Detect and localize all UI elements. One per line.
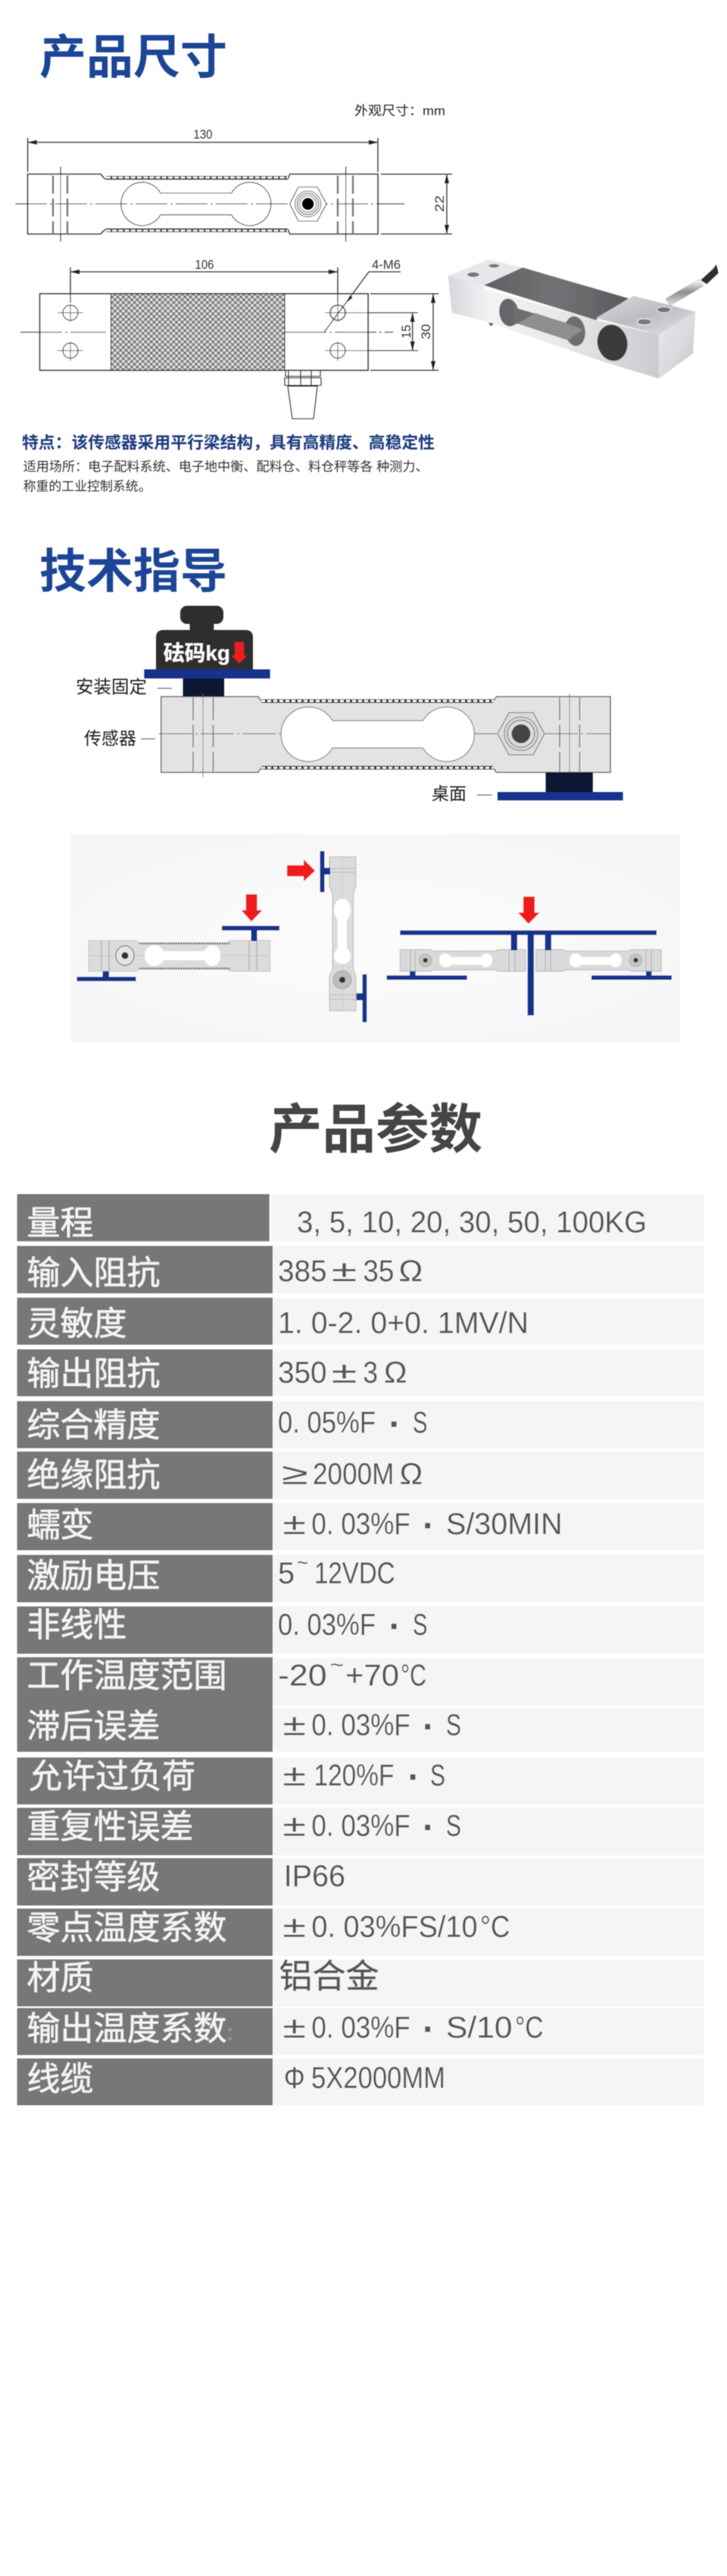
rows: working temperature and hysteresis: 0. 03%F [311, 1708, 410, 1742]
pointer: table [477, 794, 492, 796]
bone hole [281, 707, 474, 762]
dimension 106: 106 [195, 257, 214, 272]
drawing: top view with dimensions 106, 30, 15 and 4-M6 [20, 257, 438, 419]
row: output impedance: 350 [278, 1356, 327, 1389]
row: repeatability [17, 1800, 704, 1855]
top load bar with stems [400, 931, 657, 1015]
application text [23, 460, 429, 494]
row: range [17, 1194, 704, 1244]
row: cable: 5X2000MM [311, 2062, 445, 2095]
row: input impedance: 385 [278, 1255, 327, 1288]
heading: technical guide: 技术指导 [39, 533, 227, 601]
row: material: 铝合金 [279, 1949, 379, 1997]
row: allowable overload [17, 1749, 704, 1804]
label: sensor: 传感器 [84, 724, 136, 750]
row: overall accuracy: S [413, 1406, 427, 1439]
row: overall accuracy [17, 1398, 704, 1448]
row: output impedance: 3 [363, 1356, 378, 1389]
row: repeatability: S [446, 1810, 461, 1843]
orientation: horizontal single [77, 894, 279, 981]
red arrow down [232, 642, 247, 663]
row: zero temperature coefficient [17, 1901, 704, 1956]
row: non-linearity: 0. 03%F [278, 1608, 376, 1642]
row: input impedance [17, 1246, 704, 1294]
top mounting plate [144, 669, 270, 678]
application text: 称重的工业控制系统。 [23, 479, 151, 494]
row: repeatability: 0. 03%F [311, 1810, 410, 1843]
row: output temperature coefficient: ± [282, 2011, 306, 2044]
row: cable [17, 2052, 704, 2105]
row: non-linearity [17, 1598, 704, 1654]
row: sealing grade: IP66 [284, 1860, 345, 1893]
bands and centre lines [193, 697, 579, 772]
cable [668, 264, 719, 302]
label: table: 桌面 [432, 779, 466, 805]
row: creep [17, 1498, 704, 1550]
row: creep: ± [282, 1508, 306, 1541]
table plate [498, 792, 623, 800]
row: input impedance: 35 [363, 1255, 394, 1288]
row: allowable overload: S [430, 1759, 445, 1792]
row: allowable overload: 允许过负荷 [29, 1749, 195, 1798]
dimension 22: 22 [432, 195, 447, 212]
bone slot through hole [498, 298, 587, 348]
bottom support block [546, 772, 593, 792]
row: non-linearity: · [389, 1607, 401, 1647]
dimension 130 [28, 127, 378, 172]
rows: working temperature and hysteresis: S [446, 1708, 461, 1742]
rows: working temperature and hysteresis: · [423, 1707, 435, 1748]
top right block [596, 296, 695, 335]
row: overall accuracy: · [389, 1405, 401, 1445]
row: cable: 线缆 [27, 2052, 94, 2100]
sensor outline [28, 174, 378, 234]
row: input impedance: Ω [398, 1255, 423, 1288]
row: allowable overload: · [408, 1757, 420, 1798]
row: sensitivity: 灵敏度 [27, 1296, 127, 1345]
diagram: load on sensor mounted on table [76, 606, 623, 805]
threaded holes [467, 264, 671, 325]
top T plate [320, 851, 330, 892]
red arrow down [242, 894, 262, 922]
panel: three mounting orientations [71, 834, 680, 1043]
row: output temperature coefficient: 输出温度系数: [27, 2001, 233, 2050]
left mini sensor [400, 950, 526, 971]
row: insulation resistance: 绝缘阻抗 [27, 1448, 161, 1496]
row: excitation voltage: ~ [297, 1551, 308, 1574]
row: creep: 蠕变 [27, 1498, 94, 1546]
heading: product dimensions: 产品尺寸 [39, 19, 227, 87]
row: range: 3, 5, 10, 20, 30, 50, 100KG [297, 1206, 647, 1240]
orientation: dual mirrored [386, 897, 672, 1015]
row: input impedance: 输入阻抗 [27, 1246, 161, 1294]
row: output temperature coefficient: °C [515, 2011, 544, 2044]
row: zero temperature coefficient: ± [282, 1910, 306, 1944]
leader 4-M6 [324, 257, 401, 332]
row: sensitivity [17, 1296, 704, 1345]
bone hole [121, 182, 271, 226]
end tab [488, 323, 494, 326]
orientation: vertical single [287, 851, 367, 1022]
front face [448, 276, 659, 379]
heading: product parameters: 产品参数 [269, 1087, 482, 1164]
row: repeatability: · [423, 1808, 435, 1848]
bottom T plate [357, 975, 367, 1022]
round through hole [594, 322, 631, 363]
calibration weight [156, 606, 253, 670]
bead strips [106, 177, 288, 230]
end bands [53, 176, 353, 234]
row: non-linearity: S [413, 1608, 427, 1642]
dimension 30: 30 [419, 324, 433, 339]
centre line [20, 332, 393, 333]
rows: working temperature and hysteresis [17, 1648, 704, 1752]
row: creep: · [423, 1506, 435, 1546]
pointer: sensor [141, 738, 155, 740]
row: creep: 0. 03%F [311, 1508, 410, 1541]
rows: working temperature and hysteresis: °C [401, 1659, 426, 1692]
drawing: side view with dimensions 130 and 22 [15, 127, 452, 242]
row: zero temperature coefficient: °C [480, 1910, 510, 1944]
row: allowable overload: ± [282, 1759, 306, 1792]
label: mounting: 安装固定 [76, 672, 147, 698]
top left block [448, 260, 523, 285]
red arrow down [518, 897, 539, 924]
row: excitation voltage: 激励电压 [27, 1548, 161, 1597]
row: creep: S/30MIN [446, 1508, 563, 1541]
row: insulation resistance [17, 1448, 704, 1499]
row: output impedance: ± [332, 1356, 357, 1389]
pointer: mounting [158, 688, 172, 689]
dimension 15: 15 [399, 325, 413, 338]
row: allowable overload: 120%F [314, 1759, 394, 1792]
caption: outline dimensions unit: 外观尺寸：mm [354, 104, 445, 118]
row: zero temperature coefficient: 0. 03%FS/10 [311, 1910, 478, 1944]
table: parameters [17, 1194, 704, 2105]
row: output temperature coefficient: 0. 03%F [311, 2011, 410, 2044]
red arrow right [287, 859, 315, 881]
row: non-linearity: 非线性 [27, 1598, 127, 1646]
row: range: 量程 [27, 1196, 94, 1244]
top spacer block [183, 678, 224, 697]
row: sealing grade: 密封等级 [27, 1850, 161, 1898]
nut [290, 187, 326, 221]
grey rubber plate [484, 267, 629, 320]
dimension 15 [399, 313, 415, 351]
row: output impedance [17, 1346, 704, 1396]
dimension 30 [370, 294, 438, 370]
product photo: aluminium single-point load cell [448, 260, 719, 379]
row: insulation resistance: Ω [400, 1458, 423, 1491]
dimension 130: 130 [194, 127, 212, 142]
rows: working temperature and hysteresis: -20 [278, 1659, 327, 1692]
right T support [591, 971, 672, 980]
row: excitation voltage: 12VDC [314, 1557, 395, 1590]
rows: working temperature and hysteresis: ± [282, 1708, 306, 1742]
row: output impedance: Ω [384, 1356, 407, 1389]
mounting holes [58, 303, 418, 361]
body outline [40, 294, 368, 370]
row: overall accuracy: 0. 05%F [278, 1406, 376, 1439]
row: repeatability: 重复性误差 [27, 1800, 194, 1848]
rows: working temperature and hysteresis: +70 [345, 1659, 399, 1692]
right end face [659, 312, 695, 379]
rows: working temperature and hysteresis: ~ [330, 1653, 344, 1676]
row: material [17, 1949, 704, 2007]
row: cable: Φ [284, 2062, 305, 2095]
bottom T support [77, 971, 136, 981]
knurled mesh plate [111, 294, 285, 370]
dimension 22 [381, 174, 452, 234]
leader 4-M6: 4-M6 [372, 257, 401, 272]
rows: working temperature and hysteresis: 工作温度范围 [27, 1648, 227, 1697]
application text: 适用场所：电子配料系统、电子地中衡、配料仓、料仓秤等各 种测力、 [23, 460, 429, 474]
row: zero temperature coefficient: 零点温度系数 [27, 1901, 227, 1949]
top T load plate [222, 926, 279, 941]
row: overall accuracy: 综合精度 [27, 1398, 161, 1446]
row: output impedance: 输出阻抗 [27, 1346, 161, 1395]
row: output temperature coefficient [17, 2001, 704, 2055]
nut [498, 713, 544, 755]
row: output temperature coefficient: S/10 [446, 2011, 512, 2044]
row: insulation resistance: ≥ [282, 1458, 308, 1491]
rows: working temperature and hysteresis: 滞后误差 [27, 1699, 161, 1748]
row: insulation resistance: 2000M [313, 1458, 394, 1491]
row: excitation voltage [17, 1548, 704, 1602]
dimension 106 [70, 257, 338, 303]
row: material: 材质 [27, 1951, 94, 1999]
row: sensitivity: 1. 0-2. 0+0. 1MV/N [278, 1307, 529, 1340]
row: input impedance: ± [332, 1255, 357, 1288]
left T support [386, 971, 467, 980]
weight label: 砝码kg [164, 641, 230, 665]
cable gland [285, 370, 321, 419]
right mini sensor [536, 950, 661, 971]
row: repeatability: ± [282, 1810, 306, 1843]
sensor body [159, 694, 610, 777]
centre line [15, 203, 404, 204]
row: excitation voltage: 5 [278, 1557, 295, 1590]
row: sealing grade [17, 1850, 704, 1905]
row: output temperature coefficient: · [423, 2010, 435, 2050]
feature statement: 特点：该传感器采用平行梁结构，具有高精度、高稳定性 [22, 430, 435, 454]
